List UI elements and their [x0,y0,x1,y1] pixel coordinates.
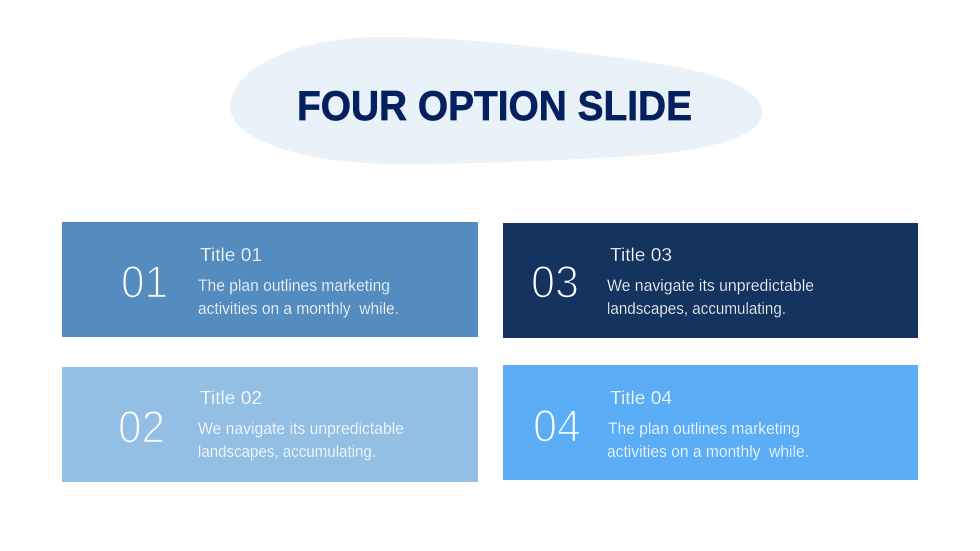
number 02: 02 [118,402,165,452]
panel: option 01 [62,222,478,337]
heading: title 04: Title 04 [610,388,672,408]
text block 02: We navigate its unpredictable [198,420,404,438]
heading: title 01: Title 01 [200,245,262,265]
text block 04: The plan outlines marketing [608,420,800,438]
text block 03: We navigate its unpredictable [607,277,814,295]
text block 04 [607,420,809,461]
text block 03 [607,277,814,318]
panel: option 04 [503,365,918,480]
blob background [230,37,762,164]
number 03: 03 [531,256,579,308]
text block 01: activities on a monthly while. [198,300,399,318]
heading: title 02: Title 02 [200,388,262,408]
panel: option 03 [503,223,918,338]
title: FOUR OPTION SLIDE [297,82,692,129]
panel: option 02 [62,367,478,482]
number 01: 01 [121,256,168,308]
text block 02 [198,420,404,461]
header blob with title [230,37,762,164]
heading: title 03: Title 03 [610,245,672,265]
text block 01 [198,277,399,318]
text block 01: The plan outlines marketing [198,277,390,295]
text block 04: activities on a monthly while. [607,443,809,461]
text block 03: landscapes, accumulating. [607,300,786,318]
text block 02: landscapes, accumulating. [198,443,376,461]
number 04: 04 [533,400,581,452]
